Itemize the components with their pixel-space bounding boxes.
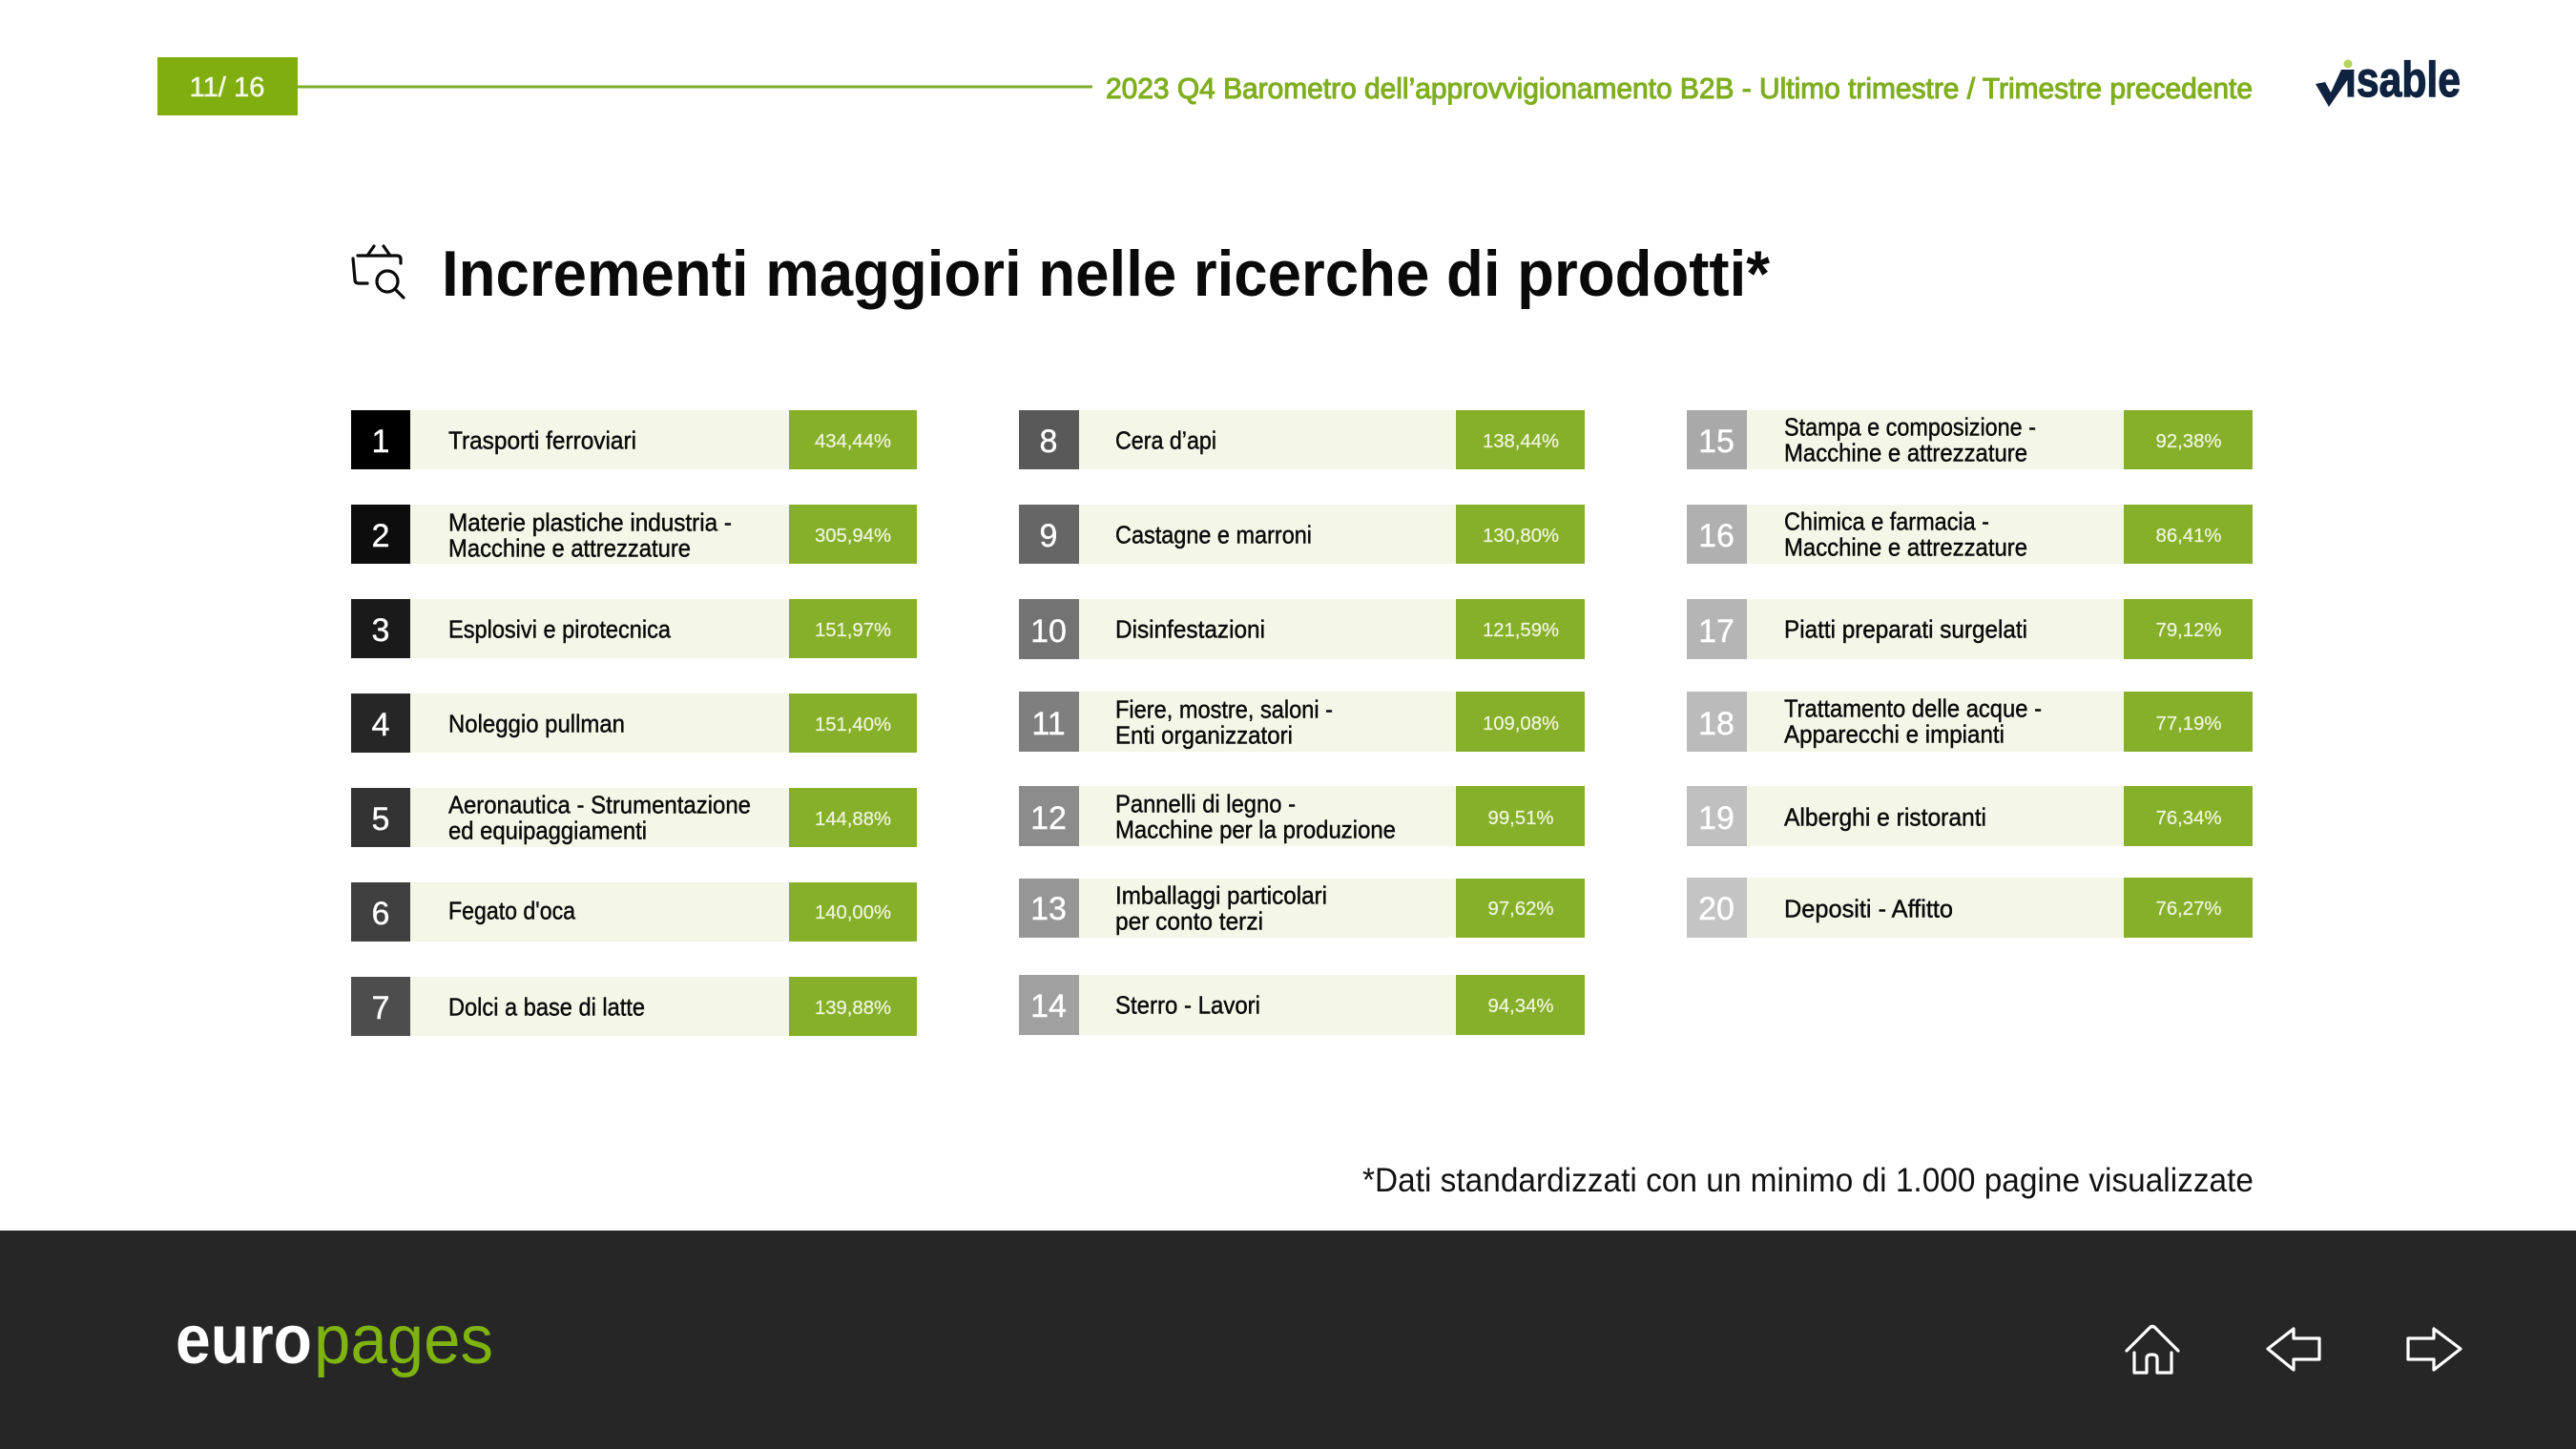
icon: left arrow [2268, 1329, 2319, 1370]
row 7: Dolci a base di latte [448, 992, 645, 1021]
row 9: 130,80% [1483, 526, 1559, 547]
row 13: Imballaggi particolari [1115, 881, 1327, 910]
header title: 2023 Q4 Barometro dell’approvvigionamento B2B - Ultimo trimestre / Trimestre precedente [1106, 72, 2253, 105]
row 19: 76,34% [2156, 808, 2222, 829]
row 5 [351, 788, 917, 847]
row 13: 13 [1030, 891, 1067, 927]
row 6: 140,00% [815, 902, 891, 923]
row 16: 16 [1698, 518, 1735, 554]
row 9 [1019, 505, 1585, 564]
europages logo: euro [176, 1302, 312, 1378]
row 16: Chimica e farmacia - [1784, 507, 1989, 536]
row 14: Sterro - Lavori [1115, 990, 1260, 1019]
row 20 [1687, 878, 2253, 938]
row 3: 151,97% [815, 620, 891, 641]
row 18: 77,19% [2156, 714, 2222, 735]
row 2: 305,94% [815, 526, 891, 547]
row 16: 86,41% [2156, 526, 2222, 547]
row 3 [351, 599, 917, 658]
row 1: Trasporti ferroviari [448, 425, 636, 454]
row 2: Materie plastiche industria - [448, 507, 732, 536]
row 12: Macchine per la produzione [1115, 815, 1396, 843]
row 1: 1 [372, 424, 389, 460]
row 13 [1019, 879, 1585, 938]
row 13: per conto terzi [1115, 906, 1263, 935]
row 11: Fiere, mostre, saloni - [1115, 694, 1333, 723]
row 2: Macchine e attrezzature [448, 534, 691, 563]
panel: column 1 ranking [351, 410, 917, 1036]
row 3: 3 [372, 612, 389, 649]
row 20: 76,27% [2156, 899, 2222, 920]
row 8: Cera d’api [1115, 425, 1216, 454]
row 14: 94,34% [1488, 996, 1554, 1017]
row 16: Macchine e attrezzature [1784, 532, 2027, 561]
row 14: 14 [1030, 988, 1067, 1025]
row 17: 17 [1698, 613, 1735, 650]
europages logo [176, 1302, 493, 1378]
row 1 [351, 410, 917, 469]
row 4 [351, 693, 917, 753]
row 17: Piatti preparati surgelati [1784, 614, 2027, 643]
row 6: Fegato d'oca [448, 897, 575, 925]
row 7: 139,88% [815, 998, 891, 1019]
row 9: 9 [1040, 518, 1057, 554]
row 5: Aeronautica - Strumentazione [448, 790, 751, 818]
row 7: 7 [372, 990, 389, 1026]
row 4: 4 [372, 707, 389, 743]
row 19: Alberghi e ristoranti [1784, 803, 1986, 832]
row 12: 99,51% [1488, 808, 1554, 829]
row 17: 79,12% [2156, 620, 2222, 641]
visable logo [2316, 52, 2461, 108]
row 15: 92,38% [2156, 431, 2222, 452]
row 18: 18 [1698, 706, 1735, 742]
icon: right arrow [2408, 1329, 2461, 1370]
row 2 [351, 505, 917, 564]
row 5: ed equipaggiamenti [448, 817, 647, 845]
row 10: 121,59% [1483, 620, 1559, 641]
row 15 [1687, 410, 2253, 469]
row 12: Pannelli di legno - [1115, 790, 1296, 818]
row 15: Stampa e composizione - [1784, 412, 2036, 441]
page number badge: 11/ 16 [189, 72, 265, 103]
row 11: 109,08% [1483, 714, 1559, 735]
row 20: Depositi - Affitto [1784, 895, 1953, 923]
row 11 [1019, 692, 1585, 752]
row 6: 6 [372, 896, 389, 932]
row 6 [351, 882, 917, 942]
row 13: 97,62% [1488, 899, 1554, 920]
row 15: Macchine e attrezzature [1784, 439, 2027, 467]
row 18: Apparecchi e impianti [1784, 719, 2005, 748]
row 12: 12 [1030, 800, 1067, 837]
icon: home [2127, 1326, 2178, 1373]
panel: column 3 ranking [1687, 410, 2253, 938]
row 19: 19 [1698, 800, 1735, 837]
row 5: 5 [372, 801, 389, 838]
panel: column 2 ranking [1019, 410, 1585, 1035]
row 11: 11 [1031, 706, 1066, 742]
row 20: 20 [1698, 891, 1735, 927]
row 19 [1687, 786, 2253, 846]
row 5: 144,88% [815, 809, 891, 830]
footnote: *Dati standardizzati con un minimo di 1.000 pagine visualizzate [1362, 1162, 2254, 1199]
row 10: 10 [1030, 613, 1067, 650]
row 18: Trattamento delle acque - [1784, 694, 2042, 723]
row 15: 15 [1698, 424, 1735, 460]
row 17 [1687, 599, 2253, 659]
row 8 [1019, 410, 1585, 469]
row 2: 2 [372, 518, 389, 554]
row 12 [1019, 786, 1585, 846]
europages logo: pages [314, 1302, 493, 1378]
header bar [157, 52, 2461, 115]
title block [353, 238, 1770, 310]
row 8: 138,44% [1483, 431, 1559, 452]
visable logo: isable [2345, 52, 2461, 108]
row 7 [351, 977, 917, 1036]
row 10 [1019, 599, 1585, 659]
row 16 [1687, 505, 2253, 564]
row 11: Enti organizzatori [1115, 721, 1293, 750]
title: Incrementi maggiori nelle ricerche di prodotti* [442, 238, 1770, 310]
row 9: Castagne e marroni [1115, 521, 1312, 549]
icon: shopping basket with magnifier [353, 246, 404, 298]
footer bar [0, 1231, 2576, 1449]
row 3: Esplosivi e pirotecnica [448, 614, 671, 643]
row 1: 434,44% [815, 431, 891, 452]
row 10: Disinfestazioni [1115, 614, 1265, 643]
row 4: Noleggio pullman [448, 710, 625, 738]
row 8: 8 [1040, 424, 1057, 460]
row 4: 151,40% [815, 714, 891, 735]
page number badge [157, 57, 298, 115]
row 14 [1019, 975, 1585, 1035]
row 18 [1687, 692, 2253, 752]
